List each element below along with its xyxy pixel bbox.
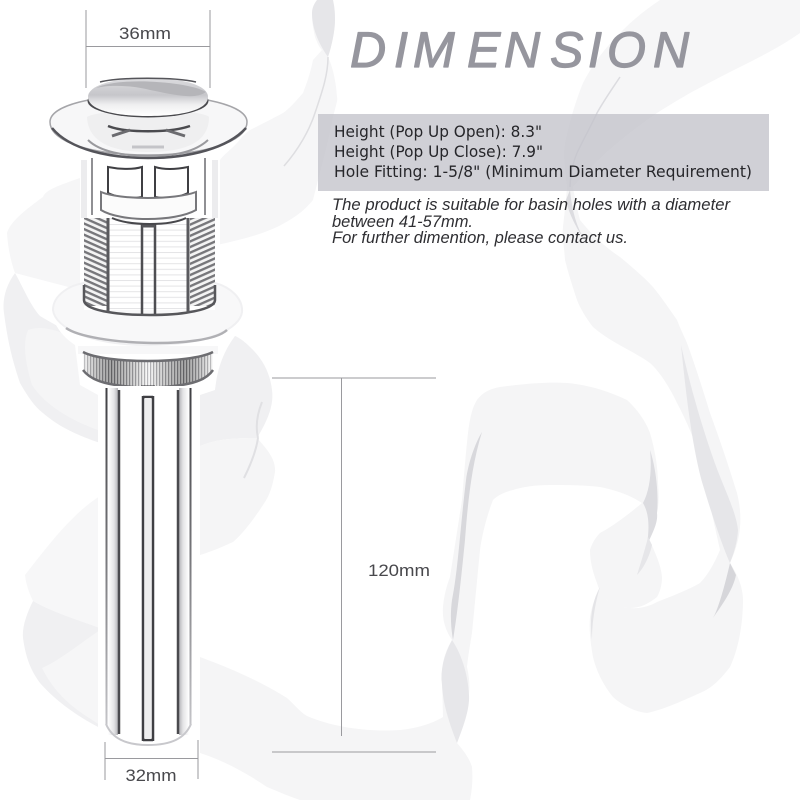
background ribbon: top left sweep	[7, 0, 337, 290]
note text: between 41-57mm.	[332, 213, 473, 231]
pop-up cap	[88, 78, 208, 118]
white halo around product	[50, 88, 247, 755]
background ribbon: lower right	[563, 187, 743, 713]
note text: For further dimention, please contact us.	[332, 229, 628, 247]
title: DIMENSION	[350, 22, 690, 78]
background ribbon: left lobe and right loop	[3, 273, 275, 555]
threaded body	[84, 158, 215, 315]
top flange	[50, 95, 247, 158]
specification panel	[318, 114, 769, 191]
dimension: 36mm: 36mm	[119, 24, 171, 43]
knurled nut	[83, 352, 213, 388]
dimension: 36mm	[86, 10, 210, 88]
note text	[332, 196, 732, 247]
long tailpiece tube	[105, 386, 192, 745]
product: pop-up drain	[50, 78, 247, 755]
background ribbon: bottom sweep and arch	[200, 383, 662, 800]
dimension: 32mm: 32mm	[126, 766, 176, 785]
background ribbon: upper right	[564, 0, 800, 190]
white mounting flange	[53, 283, 242, 354]
spec line: close height: Height (Pop Up Close): 7.9"	[334, 142, 543, 161]
spec line: hole fitting: Hole Fitting: 1-5/8" (Minimum Diameter Requirement)	[334, 162, 752, 181]
dimension: 120mm	[272, 378, 436, 752]
note text: The product is suitable for basin holes with a diameter	[332, 196, 732, 214]
dimension: 32mm	[105, 740, 198, 785]
background ribbon: lower left	[23, 496, 100, 728]
spec line: open height: Height (Pop Up Open): 8.3"	[334, 122, 542, 141]
dimension: 120mm: 120mm	[368, 561, 430, 580]
